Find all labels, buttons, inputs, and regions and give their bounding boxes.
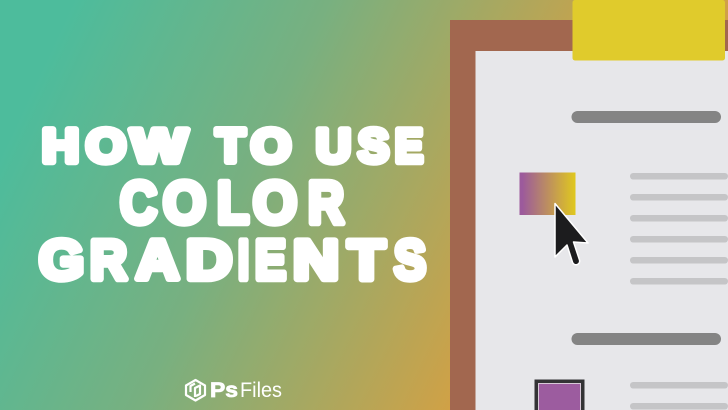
icon: mouse cursor — [555, 204, 588, 265]
clipboard — [450, 0, 728, 410]
logo wordmark — [210, 379, 282, 402]
title line 1: T — [216, 119, 245, 172]
heading bar 2 — [572, 333, 721, 345]
title line 2: L — [217, 170, 249, 236]
title line 2: C — [120, 170, 157, 236]
clipboard board — [450, 20, 728, 410]
title line 1: O — [86, 119, 126, 172]
logo: PsFiles — [186, 379, 282, 402]
title — [39, 119, 426, 291]
title line 3: T — [348, 228, 385, 291]
logo wordmark: Ps — [210, 379, 238, 402]
heading bar 1 — [572, 111, 721, 123]
title line 1: U — [316, 119, 351, 172]
title line 3: I — [238, 228, 249, 291]
text lines group 2 — [630, 382, 728, 410]
paper sheet — [476, 51, 728, 410]
title line 2 — [120, 170, 344, 236]
purple swatch selected — [534, 380, 584, 410]
title line 3: A — [136, 228, 179, 291]
title line 3: E — [255, 228, 286, 291]
text lines group 1 — [630, 173, 728, 284]
title line 1: O — [251, 119, 291, 172]
yellow clip — [572, 0, 725, 60]
title line 2: R — [308, 170, 344, 236]
icon: hexagon logo mark — [186, 380, 205, 400]
title line 3: N — [293, 228, 339, 291]
title line 1: E — [395, 119, 423, 172]
title line 2: O — [163, 170, 206, 236]
title line 1 — [42, 119, 423, 172]
logo wordmark: Files — [240, 379, 282, 402]
title line 3 — [39, 228, 426, 291]
title line 2: O — [253, 170, 297, 236]
title line 3: R — [90, 228, 127, 291]
gradient swatch — [520, 172, 576, 215]
title line 1: W — [131, 119, 188, 172]
title line 3: S — [394, 228, 426, 291]
title line 1: S — [358, 119, 389, 172]
title line 3: D — [186, 228, 232, 291]
title line 3: G — [39, 228, 84, 291]
title line 1: H — [42, 119, 79, 172]
